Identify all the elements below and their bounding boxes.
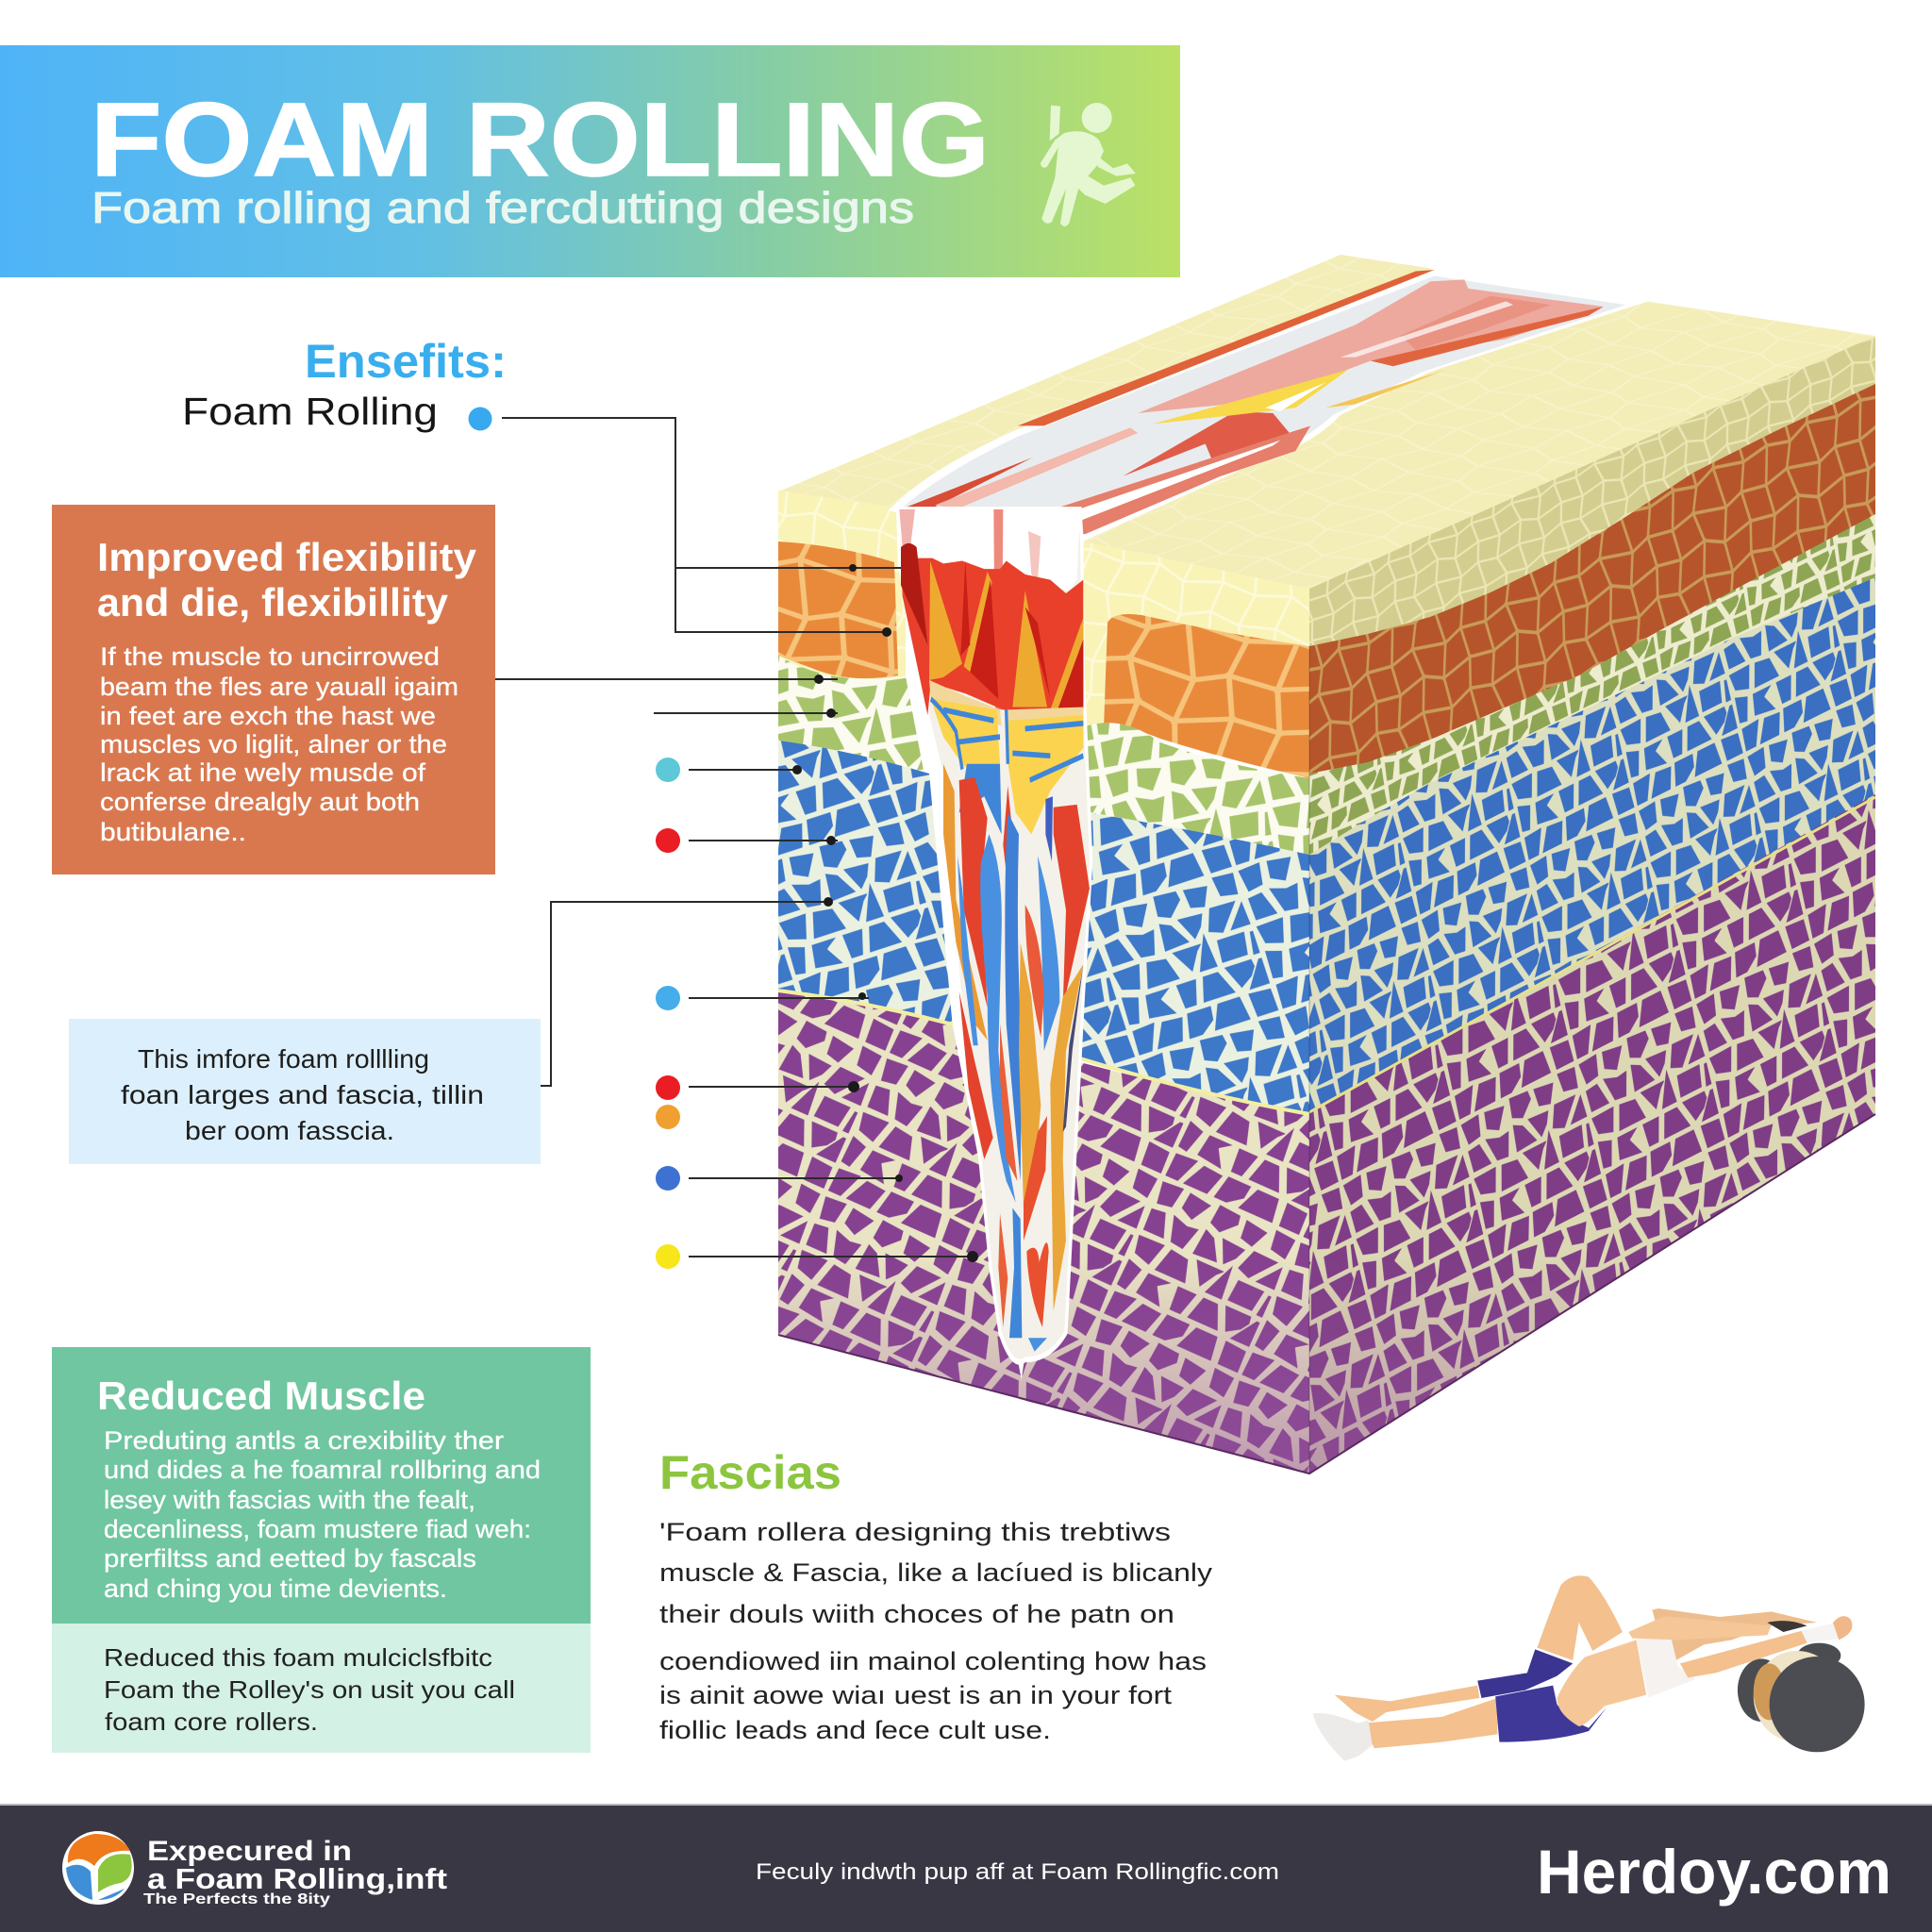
panel: reduced muscle <box>52 1347 591 1624</box>
callout leader lines and dots <box>485 418 978 1262</box>
front face left column layers <box>778 491 1025 1400</box>
note text: Reduced this foam mulciclsfbitc <box>104 1643 492 1672</box>
body text: butibulane.. <box>100 818 246 846</box>
fascias section <box>659 1446 1213 1744</box>
body text: lesey with fascias with the fealt, <box>104 1486 475 1514</box>
footer center text: Feculy indwth pup aff at Foam Rollingfic.com <box>756 1859 1279 1885</box>
note text: Foam the Rolley's on usit you call <box>104 1675 515 1704</box>
body text: beam the fles are yauall igaim <box>100 673 458 701</box>
illustration: person on foam roller <box>1313 1575 1865 1761</box>
note text <box>104 1643 515 1736</box>
heading: and die, flexibillity <box>97 580 449 625</box>
note text: ber oom fasscia. <box>185 1116 394 1145</box>
body text: muscle & Fascia, like a lacíued is blicanly <box>659 1558 1213 1587</box>
front face right column layers <box>778 540 1875 1474</box>
note text: foam core rollers. <box>105 1707 318 1736</box>
body text: coendiowed iin mainol colenting how has <box>659 1647 1207 1675</box>
body text: conferse drealgly aut both <box>100 788 420 816</box>
body text: If the muscle to uncirrowed <box>100 642 440 671</box>
colored marker dots <box>468 408 680 1269</box>
brand text: a Foam Rolling,inft <box>147 1862 447 1895</box>
body text: decenliness, foam mustere fiad weh: <box>104 1515 531 1543</box>
body text: muscles vo liglit, alner or the <box>100 730 447 758</box>
foam rolling label: Foam Rolling <box>182 390 438 433</box>
brand text: Expecured in <box>147 1836 352 1867</box>
body text: is ainit aowe wiaı uest is an in your fort <box>659 1681 1173 1709</box>
brand text: The Perfects the 8ity <box>143 1891 330 1907</box>
icon: running figure <box>1041 103 1136 226</box>
body text <box>104 1426 541 1603</box>
panel: improved flexibility <box>52 505 495 874</box>
cleft muscle cross-section <box>898 509 1091 1362</box>
body text <box>659 1518 1213 1744</box>
heading: Improved flexibility <box>97 535 477 579</box>
footer brand: Herdoy.com <box>1537 1837 1891 1907</box>
body text: Preduting antls a crexibility ther <box>104 1426 504 1455</box>
note text: This imfore foam rolllling <box>138 1044 429 1074</box>
body text: fiollic leads and ſece cult use. <box>659 1716 1051 1744</box>
note text <box>121 1044 484 1145</box>
body text: und dides a he foamral rollbring and <box>104 1456 541 1484</box>
body text: lrack at ihe wely musde of <box>100 758 426 787</box>
brand text <box>143 1836 447 1907</box>
body text: prerfiltss and eetted by fascals <box>104 1544 476 1573</box>
body text: their douls wiith choces of he patn on <box>659 1600 1174 1628</box>
body text: in feet are exch the hast we <box>100 702 436 730</box>
muscle on top face <box>889 268 1648 543</box>
header banner <box>0 45 1180 277</box>
heading: Reduced Muscle <box>97 1374 425 1418</box>
panel: reduced muscle note <box>52 1624 591 1753</box>
heading <box>97 535 477 625</box>
benefits heading: Ensefits: <box>305 335 507 388</box>
top face <box>781 255 1875 589</box>
heading: Fascias <box>659 1446 841 1499</box>
note text: foan larges and fascia, tillin <box>121 1080 484 1109</box>
right face layers <box>1309 336 1875 1474</box>
body text: 'Foam rollera designing this trebtiws <box>659 1518 1171 1546</box>
footer bar <box>0 1804 1932 1932</box>
logo <box>62 1831 134 1905</box>
panel: foam rolling note <box>69 1019 541 1164</box>
body text: and ching you time devients. <box>104 1574 447 1603</box>
3D tissue block <box>778 255 1875 1474</box>
title: FOAM ROLLING <box>91 82 990 198</box>
body text <box>100 642 458 846</box>
subtitle: Foam rolling and fercdutting designs <box>92 183 914 232</box>
